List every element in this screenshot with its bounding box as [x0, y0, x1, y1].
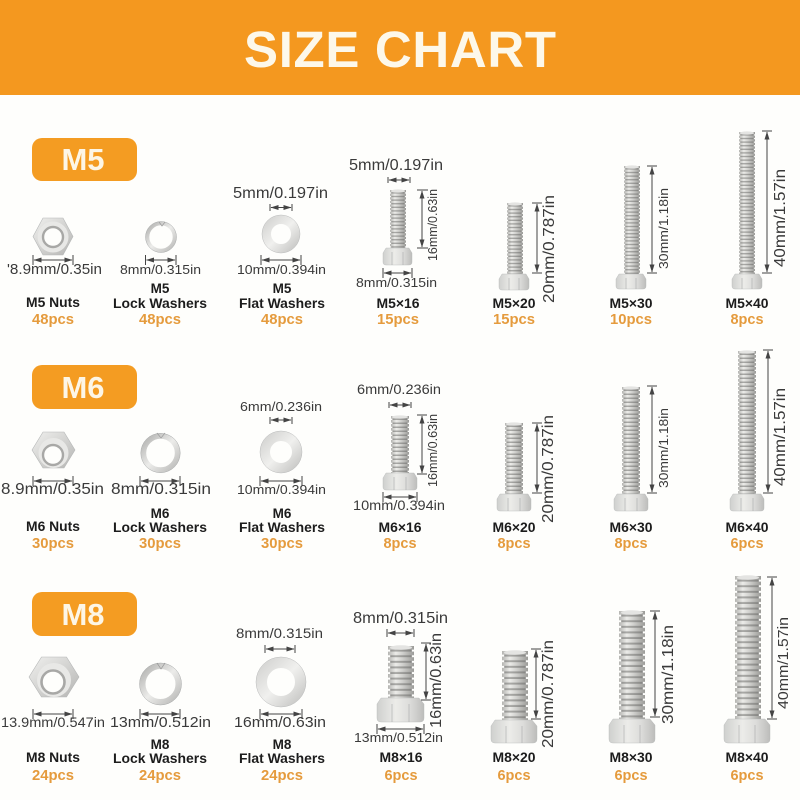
item: M8x40 bolt: M8×40	[726, 750, 768, 765]
item: M8x20 bolt: 20mm/0.787in	[540, 640, 557, 748]
item: M5x16 bolt: 15pcs	[377, 312, 419, 328]
item: M8x40 bolt	[724, 575, 792, 784]
item: M6x40 bolt	[726, 350, 789, 552]
item: M8x30 bolt	[609, 610, 677, 784]
item: M6x40 bolt: M6×40	[726, 520, 768, 535]
item: M8x16 bolt: M8×16	[380, 750, 423, 765]
panel: M6 row	[1, 350, 789, 552]
item: M6 lock washers: 30pcs	[139, 536, 181, 552]
badge: M8: M8	[61, 597, 105, 632]
item: M5x40 bolt: 40mm/1.57in	[772, 169, 789, 267]
title: SIZE CHART	[244, 21, 556, 78]
item: M8 flat washers: 24pcs	[261, 768, 303, 784]
item: M6 nuts: 30pcs	[32, 536, 74, 552]
item: M5x20 bolt: 15pcs	[493, 312, 535, 328]
item: M5x20 bolt	[492, 195, 558, 328]
item: M5x30 bolt: 30mm/1.18in	[656, 188, 671, 269]
item: M8 lock washers: M8	[151, 737, 170, 752]
item: M8 nuts: M8 Nuts	[26, 750, 80, 765]
item: M8x16 bolt: 6pcs	[384, 768, 418, 784]
item: M8 lock washers: 13mm/0.512in	[110, 714, 211, 731]
item: M5x16 bolt: M5×16	[376, 296, 420, 311]
item: M6x30 bolt: 30mm/1.18in	[656, 408, 671, 488]
item: M5x16 bolt: 5mm/0.197in	[349, 157, 443, 174]
item: M5 nuts	[7, 218, 102, 328]
item: M6 nuts: M6 Nuts	[26, 519, 80, 534]
item: M6x16 bolt: 16mm/0.63in	[426, 414, 440, 487]
badge: M6	[32, 365, 137, 409]
item: M8x30 bolt: 30mm/1.18in	[660, 625, 677, 724]
item: M5x40 bolt: M5×40	[726, 296, 768, 311]
item: M6 lock washers: 8mm/0.315in	[111, 481, 211, 498]
item: M6x16 bolt: M6×16	[378, 520, 422, 535]
item: M6 flat washers: 10mm/0.394in	[237, 482, 326, 497]
item: M6 flat washers: Flat Washers	[239, 520, 325, 535]
header banner	[0, 0, 800, 95]
item: M5x20 bolt: 20mm/0.787in	[541, 195, 558, 303]
item: M5 lock washers	[113, 222, 207, 328]
item: M5x16 bolt: 8mm/0.315in	[356, 275, 437, 290]
item: M8 flat washers: M8	[273, 737, 292, 752]
item: M6 lock washers: M6	[151, 506, 170, 521]
item: M5 nuts: '8.9mm/0.35in	[7, 262, 102, 278]
item: M5x16 bolt	[349, 157, 443, 328]
item: M6x30 bolt: 8pcs	[614, 536, 648, 552]
item: M8x20 bolt: M8×20	[492, 750, 536, 765]
item: M5 flat washers: 5mm/0.197in	[233, 185, 328, 202]
item: M6x16 bolt: 10mm/0.394in	[353, 498, 445, 513]
item: M8x16 bolt: 8mm/0.315in	[353, 610, 448, 627]
item: M5x30 bolt: M5×30	[610, 296, 652, 311]
item: M5 lock washers: M5	[151, 281, 170, 296]
item: M6 nuts: 8.9mm/0.35in	[1, 481, 104, 498]
item: M6x16 bolt	[353, 382, 445, 552]
item: M6 flat washers: M6	[273, 506, 292, 521]
item: M5x40 bolt	[726, 131, 789, 328]
item: M5 flat washers: Flat Washers	[239, 296, 325, 311]
item: M6x20 bolt: M6×20	[492, 520, 536, 535]
item: M5 nuts: M5 Nuts	[26, 295, 80, 310]
item: M5 nuts: 48pcs	[32, 312, 74, 328]
item: M6x20 bolt: 20mm/0.787in	[540, 415, 557, 523]
item: M5 flat washers	[233, 185, 328, 328]
item: M5 flat washers: 48pcs	[261, 312, 303, 328]
item: M6x16 bolt: 8pcs	[384, 536, 416, 552]
item: M5x40 bolt: 8pcs	[730, 312, 764, 328]
item: M6 flat washers: 6mm/0.236in	[240, 399, 322, 414]
panel: M8 row	[1, 575, 792, 784]
item: M5x16 bolt: 16mm/0.63in	[426, 189, 440, 261]
item: M8 lock washers: Lock Washers	[113, 751, 207, 766]
item: M8x20 bolt: 6pcs	[498, 768, 530, 784]
item: M8x20 bolt	[491, 640, 557, 784]
item: M6 flat washers	[237, 399, 326, 552]
item: M6x30 bolt	[610, 386, 671, 552]
item: M8 flat washers	[234, 625, 326, 784]
item: M8 flat washers: 16mm/0.63in	[234, 714, 326, 731]
badge: M5	[32, 138, 137, 181]
item: M5 lock washers: Lock Washers	[113, 296, 207, 311]
item: M6 flat washers: 30pcs	[261, 536, 303, 552]
item: M6x40 bolt: 40mm/1.57in	[772, 388, 789, 486]
item: M8 flat washers: 8mm/0.315in	[236, 625, 323, 641]
item: M8 lock washers: 24pcs	[139, 768, 181, 784]
item: M6x40 bolt: 6pcs	[730, 536, 764, 552]
item: M8x30 bolt: M8×30	[610, 750, 652, 765]
item: M6x20 bolt	[492, 415, 557, 552]
item: M6x16 bolt: 6mm/0.236in	[357, 382, 441, 397]
item: M8 nuts: 24pcs	[32, 768, 74, 784]
item: M8 nuts	[1, 657, 105, 784]
item: M8x40 bolt: 6pcs	[730, 768, 764, 784]
item: M5 lock washers: 8mm/0.315in	[120, 262, 201, 277]
item: M5x30 bolt	[610, 165, 671, 328]
item: M6 lock washers: Lock Washers	[113, 520, 207, 535]
item: M8 flat washers: Flat Washers	[239, 751, 325, 766]
badge: M5: M5	[61, 142, 105, 177]
item: M5x20 bolt: M5×20	[492, 296, 536, 311]
item: M5 flat washers: 10mm/0.394in	[237, 262, 326, 277]
item: M5 lock washers: 48pcs	[139, 312, 181, 328]
panel: M5 row	[7, 131, 789, 328]
badge: M6: M6	[61, 370, 105, 405]
item: M8x30 bolt: 6pcs	[614, 768, 648, 784]
item: M8x40 bolt: 40mm/1.57in	[775, 617, 792, 709]
item: M5 flat washers: M5	[273, 281, 292, 296]
item: M8x16 bolt	[353, 610, 448, 784]
item: M6 lock washers	[111, 433, 211, 552]
item: M8x16 bolt: 16mm/0.63in	[428, 633, 445, 728]
item: M8 nuts: 13.9mm/0.547in	[1, 715, 105, 730]
badge: M8	[32, 592, 137, 636]
item: M6x30 bolt: M6×30	[610, 520, 652, 535]
item: M5x30 bolt: 10pcs	[610, 312, 652, 328]
item: M8 lock washers	[110, 663, 211, 784]
item: M6 nuts	[1, 432, 104, 552]
item: M8x16 bolt: 13mm/0.512in	[354, 730, 443, 745]
item: M6x20 bolt: 8pcs	[498, 536, 530, 552]
